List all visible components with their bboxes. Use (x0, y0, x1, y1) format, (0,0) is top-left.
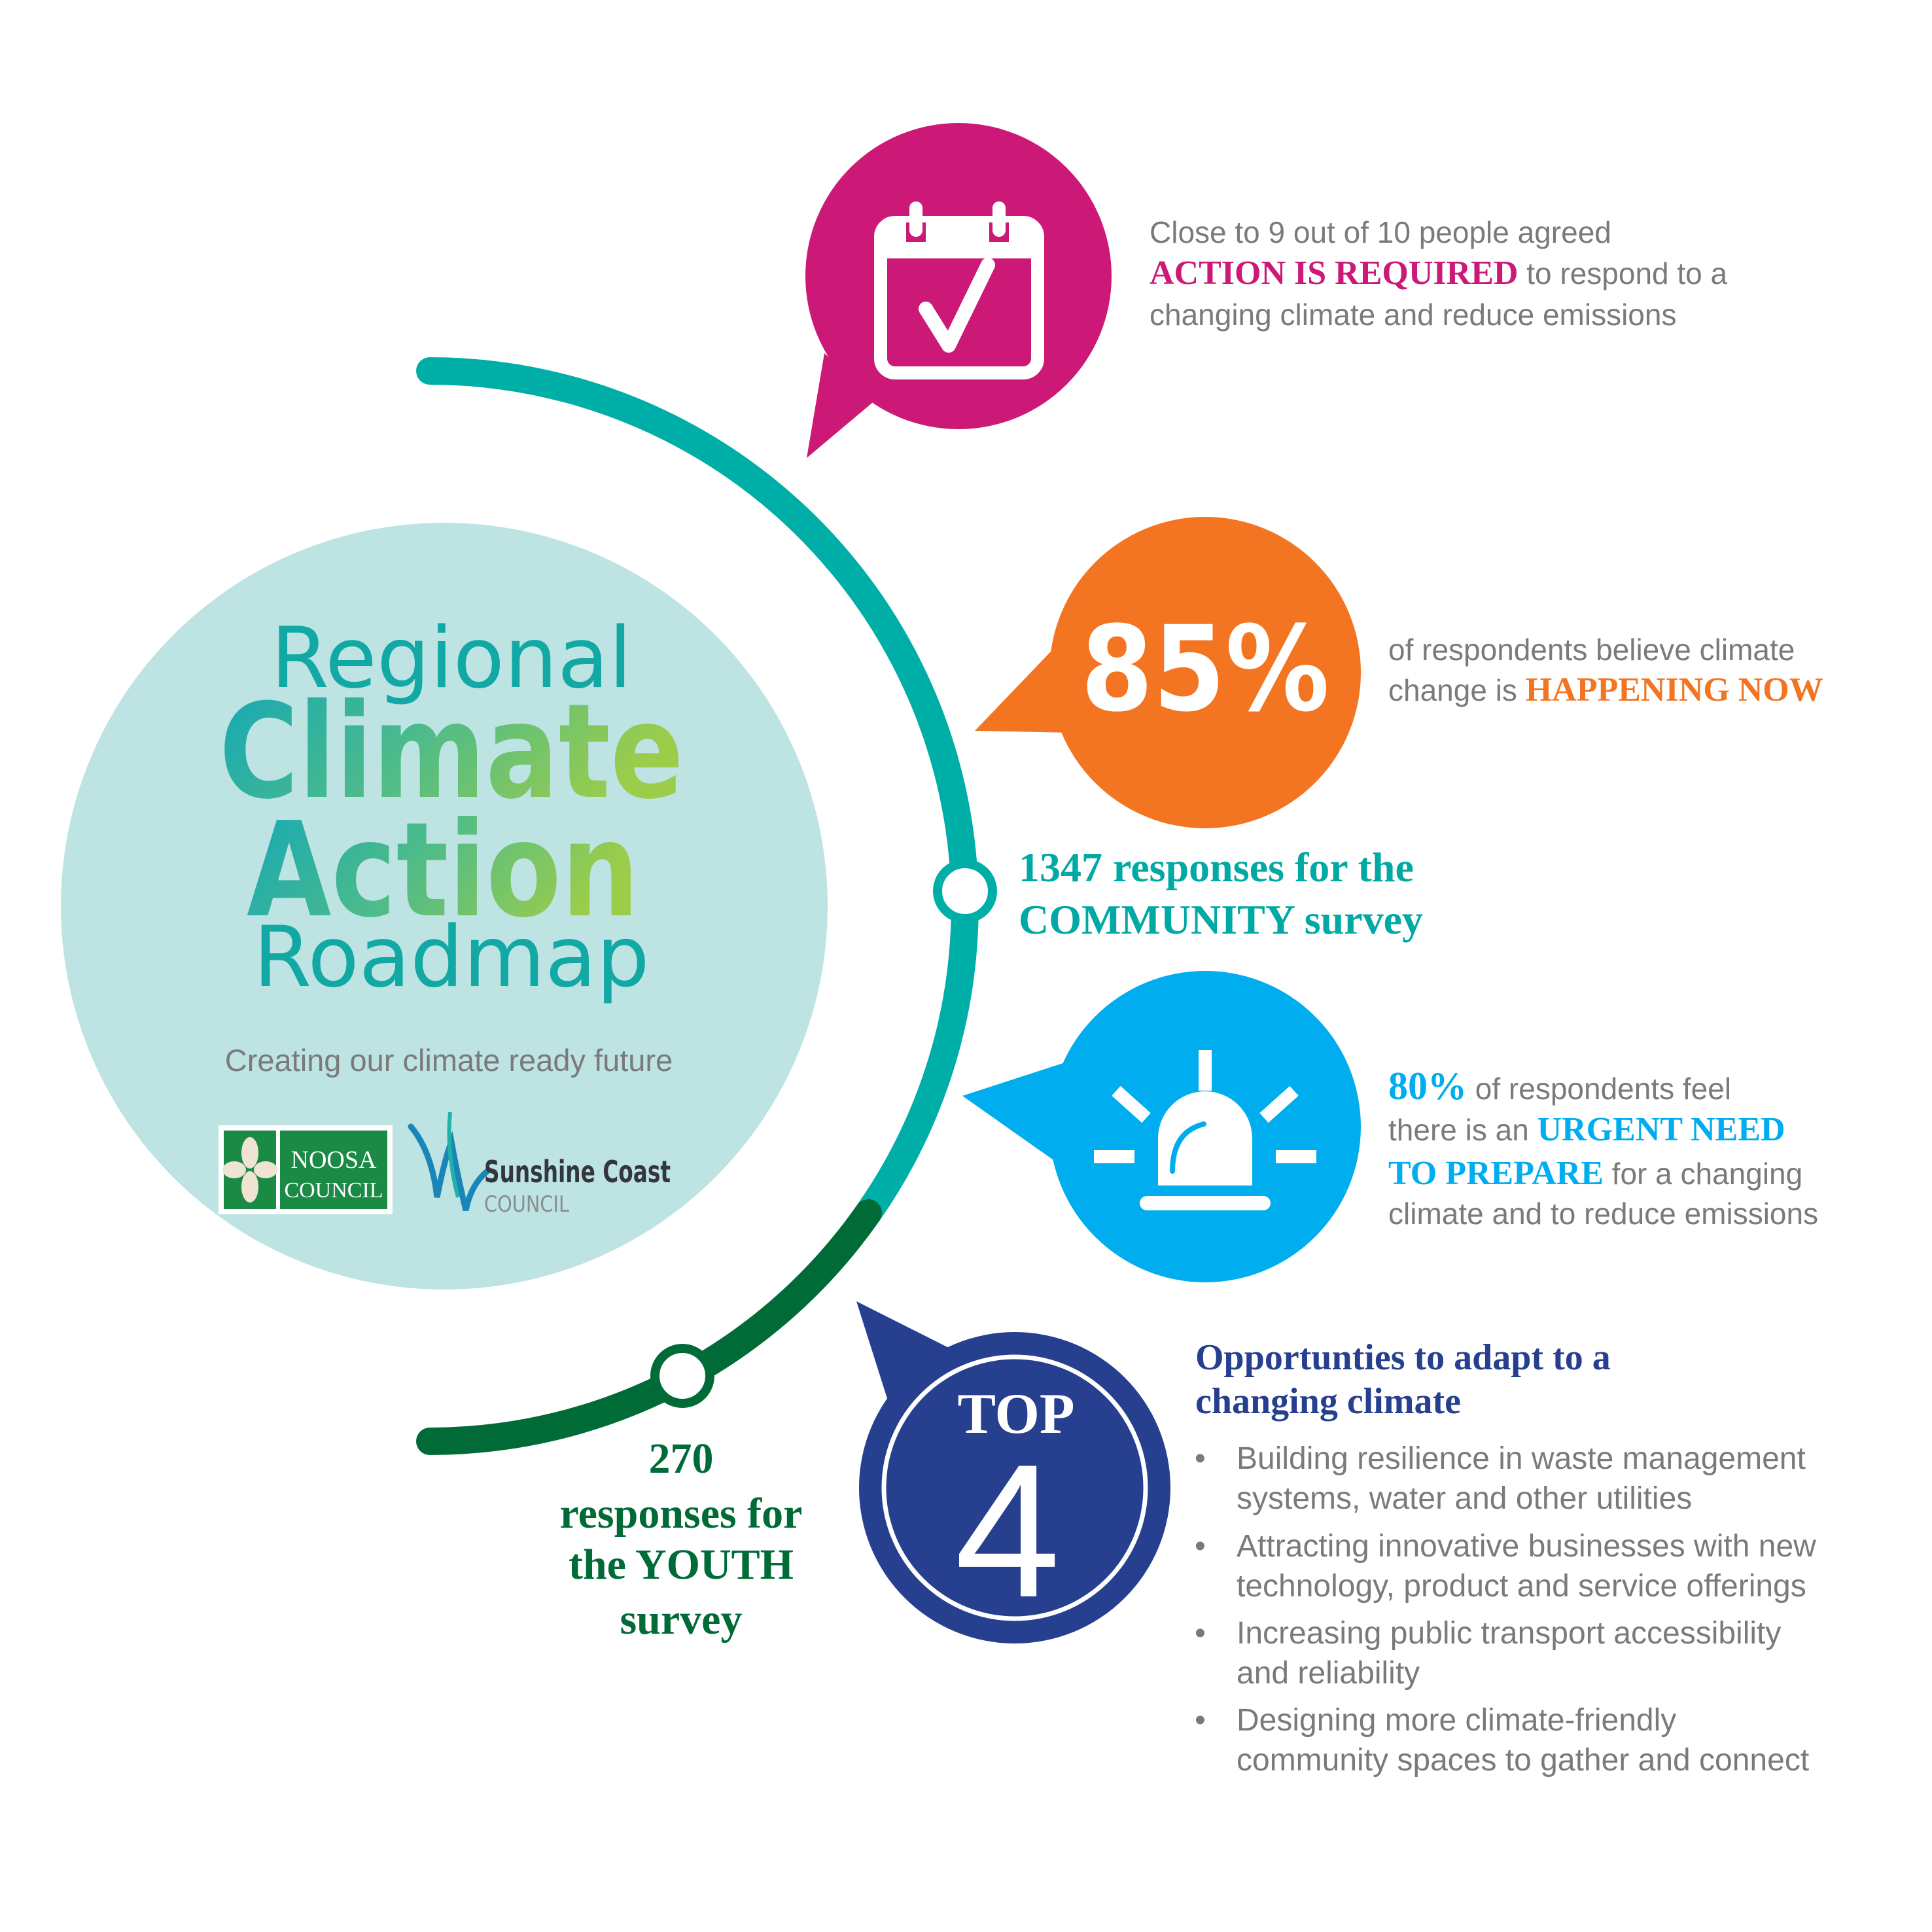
logo: noosa council (219, 1125, 393, 1214)
list: top 4 opportunities: systems, water and other utilities (1237, 1481, 1692, 1516)
logo: sunshine coast council: Sunshine Coast (484, 1154, 671, 1189)
title: Roadmap (253, 909, 650, 1006)
list: top 4 opportunities: • (1195, 1441, 1206, 1476)
text: youth survey: 270 (649, 1435, 713, 1483)
text: community survey: 1347 responses for the (1019, 844, 1414, 890)
text: urgent need (1388, 1064, 1818, 1231)
text: urgent need: there is an URGENT NEED (1388, 1111, 1785, 1148)
text: youth survey: survey (620, 1596, 742, 1643)
bubble: pink calendar (805, 123, 1112, 458)
icon: calendar check (881, 208, 1038, 373)
bubble: navy top 4: TOP (957, 1382, 1075, 1446)
list: top 4 opportunities: Increasing public transport accessibility (1237, 1616, 1781, 1651)
bubble: navy top 4 (856, 1301, 1170, 1643)
bubble: orange 85% (975, 517, 1361, 828)
title: Action (247, 794, 639, 947)
bubble: navy top 4: 4 (955, 1425, 1061, 1637)
logo: sunshine coast council: COUNCIL (484, 1191, 569, 1218)
title: Regional (271, 610, 632, 707)
list: top 4 opportunities: technology, product and service offerings (1237, 1569, 1806, 1604)
text: youth survey: the YOUTH (569, 1541, 794, 1589)
text: community survey (1019, 844, 1423, 943)
text: urgent need: climate and to reduce emissions (1388, 1197, 1818, 1231)
node: community (938, 864, 992, 919)
bubble: blue alarm (962, 971, 1361, 1282)
subtitle: Creating our climate ready future (225, 1043, 673, 1078)
text: action required (1150, 215, 1728, 332)
list: top 4 opportunities: and reliability (1237, 1656, 1420, 1691)
text: happening now: change is HAPPENING NOW (1388, 671, 1823, 709)
node: youth (655, 1348, 710, 1403)
list: top 4 opportunities (1195, 1441, 1816, 1778)
text: youth survey (560, 1435, 802, 1643)
text: urgent need: TO PREPARE for a changing (1388, 1155, 1802, 1192)
text: community survey: COMMUNITY survey (1019, 896, 1423, 943)
text: opportunities heading: Opportunties to adapt to a (1195, 1337, 1611, 1378)
text: opportunities heading (1195, 1337, 1611, 1422)
text: opportunities heading: changing climate (1195, 1381, 1461, 1422)
title (219, 610, 684, 1006)
icon: siren (1094, 1050, 1316, 1210)
text: youth survey: responses for (560, 1490, 802, 1537)
list: top 4 opportunities: Attracting innovative businesses with new (1237, 1529, 1816, 1564)
list: top 4 opportunities: • (1195, 1529, 1206, 1564)
bubble: orange 85%: 85% (1081, 601, 1329, 738)
text: happening now (1388, 633, 1823, 709)
text: happening now: of respondents believe climate (1388, 633, 1795, 667)
logo: sunshine coast council (411, 1112, 671, 1218)
list: top 4 opportunities: • (1195, 1616, 1206, 1651)
text: action required: ACTION IS REQUIRED to respond to a (1150, 255, 1728, 292)
list: top 4 opportunities: • (1195, 1703, 1206, 1738)
logo: noosa council: COUNCIL (284, 1178, 383, 1203)
text: action required: Close to 9 out of 10 people agreed (1150, 215, 1611, 249)
arc: survey timeline (430, 371, 965, 1441)
list: top 4 opportunities: Building resilience in waste management (1237, 1441, 1806, 1476)
list: top 4 opportunities: Designing more climate-friendly (1237, 1703, 1676, 1738)
panel: title circle (61, 523, 828, 1290)
logo: noosa council: NOOSA (291, 1146, 377, 1174)
text: urgent need: 80% of respondents feel (1388, 1064, 1731, 1108)
list: top 4 opportunities: community spaces to gather and connect (1237, 1743, 1809, 1778)
text: action required: changing climate and reduce emissions (1150, 298, 1676, 332)
title: Climate (219, 676, 684, 828)
